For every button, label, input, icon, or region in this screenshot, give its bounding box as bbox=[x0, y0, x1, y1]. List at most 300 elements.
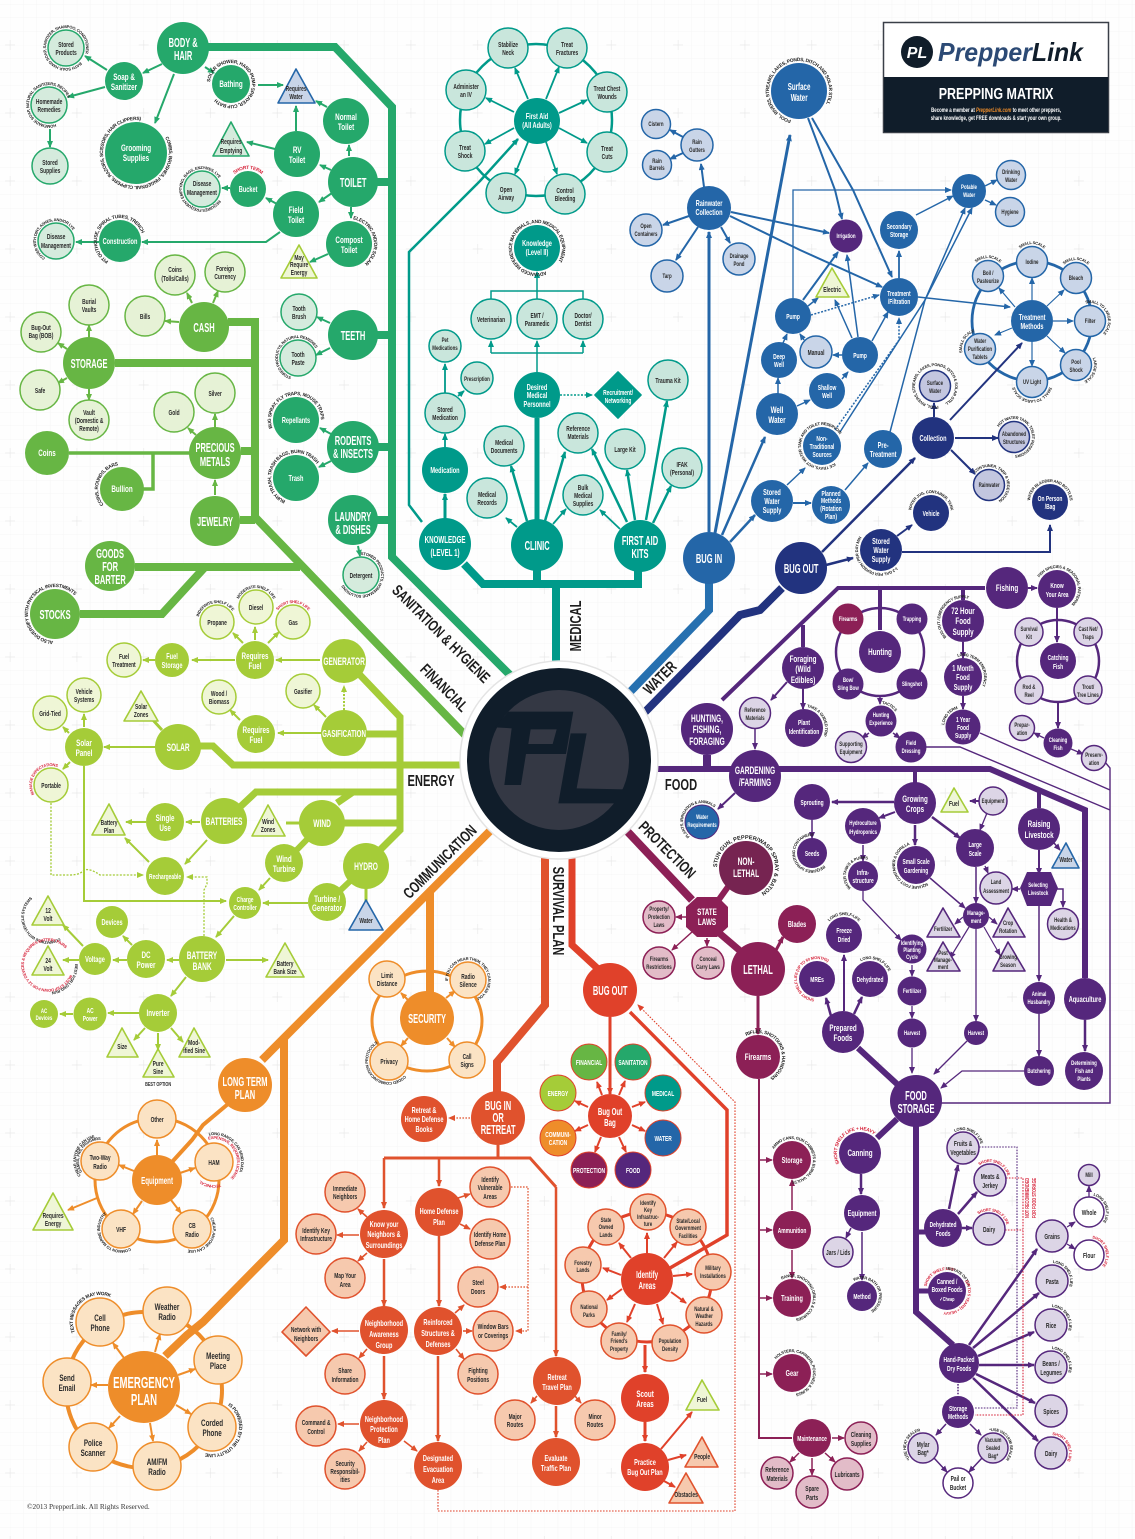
Catching Fish: Catching bbox=[1048, 655, 1069, 662]
Aquaculture bbox=[1064, 978, 1106, 1020]
Repellants: Repellants bbox=[282, 417, 310, 425]
Pet Medications: Pet bbox=[442, 337, 449, 344]
Reference Materials: Materials bbox=[568, 434, 589, 441]
Property / Protection Laws: Property/ bbox=[649, 906, 669, 913]
Hunting Experience: Hunting bbox=[873, 712, 889, 719]
State/Local Government Facilities: Facilities bbox=[679, 1233, 697, 1240]
Send Email: Send bbox=[59, 1373, 75, 1383]
triangle: Growing Season: Growing bbox=[999, 954, 1017, 961]
Gasifier: Gasifier bbox=[294, 689, 313, 696]
Pail or Bucket bbox=[943, 1468, 973, 1498]
Stored Medication: Medication bbox=[432, 415, 458, 422]
GARDENING / FARMING: GARDENING bbox=[735, 764, 775, 776]
Deep Well bbox=[761, 342, 797, 378]
triangle: Solar Zones bbox=[124, 691, 158, 721]
HUNTING, FISHING, FORAGING: FORAGING bbox=[689, 735, 725, 747]
Solar Panel bbox=[65, 728, 103, 766]
Inverter bbox=[139, 994, 177, 1032]
GARDENING / FARMING: /FARMING bbox=[739, 776, 771, 788]
Cleaning Supplies: Cleaning bbox=[851, 1432, 872, 1439]
Catching Fish bbox=[1040, 643, 1076, 679]
First Aid (All Adults): First Aid bbox=[526, 113, 548, 121]
ENERGY: ENERGY bbox=[548, 1091, 568, 1098]
Requires Fuel 2: Fuel bbox=[250, 735, 262, 745]
Treatment / Filtration: /Filtration bbox=[888, 299, 910, 306]
triangle: Battery Bank Size bbox=[266, 943, 304, 977]
Identify Vulnerable Areas bbox=[470, 1167, 510, 1207]
Reinforced Structures & Defenses: Defenses bbox=[426, 1341, 451, 1349]
Bow / Sling Bow: Sling Bow bbox=[838, 685, 859, 692]
Non-Traditional Sources: ICE TRAYS, HOT WATER TANK AND TOILET RESERVOIR bbox=[798, 422, 842, 470]
Reference Materials: Reference bbox=[566, 426, 590, 433]
Water Purification Tablets: Tablets bbox=[972, 354, 988, 361]
Dairy: SHORT SHELF LIFE bbox=[1050, 1426, 1079, 1464]
Share Information bbox=[325, 1354, 365, 1394]
Boil / Pasteurize: SMALL SCALE bbox=[973, 254, 1003, 264]
Firearms bbox=[832, 604, 864, 634]
Control Bleeding bbox=[545, 174, 585, 214]
arrows: bug out bbox=[575, 1017, 692, 1487]
MREs: SHORT SHELF LIFE (UP TO 60 MONTHS) bbox=[786, 948, 831, 1004]
Animal Husbandry bbox=[1023, 982, 1055, 1014]
Command & Control: Control bbox=[307, 1429, 325, 1436]
Privacy: CODED COMMUNICATION PROTOCOLS bbox=[365, 1041, 406, 1085]
Preservation: ation bbox=[1089, 760, 1099, 767]
Fertilizer: Fertilizer bbox=[903, 988, 922, 995]
IFAK (Personal): IFAK bbox=[677, 462, 688, 469]
panel: sanitation & hygiene: ELECTRIC AND/OR SOLAR bbox=[353, 216, 378, 266]
CLINIC: CLINIC bbox=[525, 540, 550, 554]
Shallow Well bbox=[809, 373, 845, 409]
Treatment Methods: Treatment bbox=[1019, 314, 1046, 322]
Storage Methods bbox=[942, 1396, 974, 1428]
Command & Control bbox=[296, 1406, 336, 1446]
Inverter: Inverter bbox=[146, 1008, 170, 1018]
Voltage: Voltage bbox=[85, 956, 105, 964]
Small Scale Gardening: Gardening bbox=[904, 868, 929, 875]
BATTERY BANK: BATTERY bbox=[187, 949, 217, 961]
Steel Doors: Steel bbox=[472, 1280, 484, 1287]
rings: communication bbox=[66, 971, 482, 1468]
Compost Toilet: Compost bbox=[335, 235, 363, 245]
Stored Water Supply (bug out): Supply bbox=[872, 556, 890, 564]
Prepared Foods: Foods bbox=[834, 1033, 852, 1043]
FOOD STORAGE: STORAGE bbox=[898, 1103, 935, 1117]
Cleaning Fish: Cleaning bbox=[1049, 737, 1067, 744]
WIND: WIND bbox=[313, 817, 331, 829]
PROTECTION: PROTECTION bbox=[573, 1168, 605, 1175]
Firearms: Firearms bbox=[745, 1052, 771, 1062]
BODY & HAIR bbox=[157, 22, 209, 74]
Medication: Medication bbox=[430, 467, 460, 475]
SANITATION bbox=[615, 1044, 651, 1080]
Practice Bug Out Plan bbox=[621, 1443, 669, 1491]
Freeze Dried: Freeze bbox=[836, 928, 852, 935]
Pre-Treatment: Treatment bbox=[870, 451, 897, 459]
Land Assessment: Land bbox=[991, 879, 1001, 886]
Treat Cuts: Treat bbox=[601, 146, 613, 153]
Flour bbox=[1074, 1231, 1115, 1270]
trunk lines: medical bbox=[460, 44, 638, 662]
CB Radio: Radio bbox=[185, 1232, 199, 1239]
Cleaning Fish: Fish bbox=[1053, 745, 1063, 752]
Reference Materials bbox=[558, 413, 598, 453]
Animal Husbandry: Animal bbox=[1032, 991, 1047, 998]
Military Installations bbox=[695, 1254, 731, 1290]
Medication bbox=[422, 447, 468, 493]
Radio Silence: Silence bbox=[460, 982, 477, 989]
triangle: Fuel bbox=[941, 788, 968, 812]
On Person / Bag bbox=[1026, 478, 1074, 520]
Repellants: BUG SPRAY, FLY TRAPS, MOUSE TRAPS bbox=[268, 392, 324, 429]
Storage: Storage bbox=[782, 1157, 803, 1165]
Field Dressing: Dressing bbox=[902, 748, 920, 755]
Pasta: Pasta bbox=[1046, 1279, 1059, 1286]
Solar Panel: Panel bbox=[76, 748, 92, 758]
Prescription: Prescription bbox=[464, 376, 490, 383]
Rainwater Collection: Collection bbox=[695, 209, 723, 217]
Mill bbox=[1078, 1164, 1100, 1186]
arrows: communication bbox=[68, 991, 455, 1441]
Know Your Area bbox=[1036, 554, 1092, 608]
Shallow Well: Well bbox=[822, 393, 832, 400]
FIRST AID KITS bbox=[614, 520, 666, 572]
Corded Phone: Corded bbox=[201, 1418, 223, 1428]
HAM: LONG RANGE, CAN SEND DATA bbox=[208, 1132, 244, 1172]
Plant Identification: TAKE A GUIDED TRIP bbox=[805, 699, 836, 739]
Preparation: Prepar- bbox=[1014, 722, 1030, 729]
Filter: Filter bbox=[1085, 318, 1096, 325]
COMMUNICATION bbox=[540, 1120, 576, 1156]
Pre-Treatment bbox=[864, 430, 902, 468]
Police Scanner: Police bbox=[84, 1438, 103, 1448]
Rice: Rice bbox=[1046, 1323, 1057, 1330]
Fruits & Vegetables: Vegetables bbox=[950, 1150, 976, 1157]
Treat Fractures: Fractures bbox=[556, 50, 579, 57]
Forestry Lands bbox=[565, 1247, 601, 1283]
Disease Management: Management bbox=[187, 190, 217, 197]
Cistern bbox=[642, 110, 670, 138]
Drinking Water bbox=[996, 160, 1026, 190]
Evaluate Traffic Plan bbox=[532, 1438, 580, 1486]
panel: communication bbox=[32, 828, 492, 1491]
AM/FM Radio: AM/FM bbox=[147, 1457, 167, 1467]
Drainage Pond: Pond bbox=[734, 261, 744, 268]
HUNTING, FISHING, FORAGING: HUNTING, bbox=[691, 712, 723, 724]
CASH bbox=[179, 302, 229, 352]
Single Use bbox=[146, 803, 184, 841]
Medical Documents: Documents bbox=[491, 448, 518, 455]
EMT / Paramedic bbox=[517, 299, 557, 339]
1 Year Food Supply bbox=[937, 702, 980, 744]
Preservation bbox=[1082, 746, 1106, 770]
Grid-Tied: Grid-Tied bbox=[39, 711, 61, 718]
Surface Water (bug out): Water bbox=[929, 388, 942, 395]
Pool Shock: LARGE SCALE bbox=[1084, 358, 1097, 384]
Stored Water Supply: Water bbox=[764, 498, 780, 506]
Homemade Remedies: Homemade bbox=[36, 99, 63, 106]
label: Protection: PROTECTION bbox=[635, 818, 699, 882]
LAUNDRY & DISHES: LAUNDRY bbox=[335, 511, 371, 525]
Limit Distance: Limit bbox=[381, 973, 393, 980]
72 Hour Food Supply: BUG OUT / EMERGENCY SUPPLY bbox=[927, 585, 971, 641]
label: Communication: COMMUNICATION bbox=[400, 822, 480, 902]
Stored Supplies: Stored bbox=[42, 160, 58, 167]
Major Routes bbox=[495, 1400, 535, 1440]
Identifying Planting Cycle: Cycle bbox=[906, 954, 918, 961]
trunk lines: energy bbox=[200, 675, 462, 903]
section labels bbox=[389, 581, 699, 955]
Neighborhood Protection Plan: Neighborhood bbox=[365, 1416, 403, 1424]
Infrastructure: Infra- bbox=[857, 870, 869, 877]
Pool Shock: Shock bbox=[1070, 367, 1084, 374]
Equipment (canning) bbox=[844, 1195, 880, 1231]
Pasta bbox=[1036, 1254, 1080, 1297]
panel: protection bbox=[626, 823, 877, 1508]
Management bbox=[963, 903, 989, 929]
Construction: Construction bbox=[103, 238, 137, 246]
Surface Water (bug out): POOL, RIVERS, STREAMS, LAKES, PONDS, DITCH & SOLAR STILL bbox=[904, 355, 966, 417]
Land Assessment: Assessment bbox=[983, 888, 1009, 895]
Health & Medications bbox=[1048, 908, 1078, 940]
Lubricants bbox=[831, 1458, 863, 1490]
Canning bbox=[822, 1115, 881, 1174]
Trout / Tree Lines: Trout/ bbox=[1082, 684, 1095, 691]
Abandoned Structures: Structures bbox=[1003, 439, 1025, 446]
Veterinarian: Veterinarian bbox=[477, 317, 505, 324]
LETHAL bbox=[731, 942, 785, 996]
Turbine / Generator: Generator bbox=[312, 903, 342, 913]
Land Assessment bbox=[980, 872, 1012, 904]
triangle: 12 Volt: 12 bbox=[45, 908, 51, 915]
FOOD STORAGE: FOOD bbox=[905, 1090, 927, 1104]
Bleach: SMALL SCALE bbox=[1062, 257, 1090, 265]
Burial Vaults bbox=[69, 285, 109, 325]
tagline bbox=[931, 107, 1062, 122]
Fruits & Vegetables: Fruits & bbox=[954, 1141, 973, 1148]
Dehydrated: LONG SHELF-LIFE bbox=[858, 950, 895, 973]
Identify Home Defense Plan: Identify Home bbox=[474, 1232, 507, 1239]
Retreat Travel Plan bbox=[533, 1357, 581, 1405]
Open Airway: Airway bbox=[498, 195, 515, 202]
triangle: Water: Water bbox=[359, 918, 373, 925]
arrows: bug in bbox=[332, 1158, 581, 1451]
NON-LETHAL bbox=[710, 823, 791, 898]
Harvest bbox=[898, 1018, 926, 1048]
Growing Crops: Growing bbox=[902, 794, 928, 804]
1 Month Food Supply: LONG TERM EMERGENCY bbox=[955, 644, 997, 689]
Military Installations: Military bbox=[705, 1265, 721, 1272]
triangle: Pest Management: Manage- bbox=[934, 957, 952, 964]
Stored Supplies bbox=[32, 148, 68, 184]
Stored Supplies: Supplies bbox=[40, 168, 61, 175]
Gas bbox=[275, 600, 311, 640]
triangle: Pest Management: ment bbox=[938, 964, 948, 971]
diamond: Network with Neighbors: Neighbors bbox=[294, 1336, 319, 1343]
Surface Water (bug out): Surface bbox=[927, 380, 943, 387]
Prescription bbox=[461, 362, 493, 394]
Planned Methods: Methods bbox=[821, 498, 842, 505]
Pail or Bucket: Bucket bbox=[950, 1485, 966, 1492]
Stored Medication: Stored bbox=[437, 407, 453, 414]
Pump 2 bbox=[842, 337, 878, 373]
Two-Way Radio bbox=[73, 1135, 120, 1181]
Sprouting bbox=[794, 784, 830, 820]
Gas: Gas bbox=[288, 620, 298, 627]
Gear: Gear bbox=[786, 1370, 799, 1378]
Natural & Weather Hazards: Weather bbox=[696, 1313, 714, 1320]
Propane: INDEFINITE SHELF LIFE bbox=[196, 600, 234, 616]
Lubricants: Lubricants bbox=[835, 1472, 860, 1479]
Manual bbox=[800, 336, 832, 368]
arrows: medical bbox=[409, 67, 671, 529]
Bug Out Bag: Bug Out bbox=[598, 1105, 622, 1117]
Prepared Foods bbox=[822, 1011, 864, 1053]
First Aid (All Adults): (All Adults) bbox=[522, 122, 552, 130]
Minor Routes bbox=[575, 1400, 615, 1440]
STORAGE: STORAGE bbox=[71, 358, 108, 372]
Iodine bbox=[1016, 241, 1048, 278]
GOODS FOR BARTER bbox=[85, 541, 135, 591]
Rain Gutters: Gutters bbox=[689, 147, 705, 154]
Cell Phone bbox=[70, 1292, 125, 1347]
dotted arrow: recruitment bbox=[560, 394, 592, 396]
Cell Phone: Phone bbox=[91, 1323, 110, 1333]
Trauma Kit: Trauma Kit bbox=[655, 378, 681, 385]
FOOD: FOOD bbox=[626, 1168, 641, 1175]
Plant Identification bbox=[785, 699, 836, 747]
GASIFICATION bbox=[321, 710, 367, 756]
SOLAR bbox=[155, 724, 201, 770]
Propane bbox=[196, 600, 235, 640]
Normal Toilet bbox=[323, 98, 369, 144]
Field Toilet: Field bbox=[289, 205, 304, 215]
DC Power bbox=[127, 940, 165, 978]
Stabilize Neck bbox=[488, 28, 528, 68]
triangle: Wind Zones: Zones bbox=[261, 827, 276, 834]
72 Hour Food Supply bbox=[927, 585, 984, 642]
Stabilize Neck: Stabilize bbox=[498, 42, 519, 49]
Storage bbox=[769, 1126, 826, 1188]
Normal Toilet: Toilet bbox=[338, 122, 355, 132]
triangle: Crop Rotation bbox=[993, 908, 1025, 937]
triangle: Water: Water bbox=[1059, 857, 1073, 864]
Beans / Legumes: LONG SHELF LIFE bbox=[1049, 1340, 1079, 1376]
TEETH: TEETH bbox=[341, 330, 365, 344]
Grains: Grains bbox=[1044, 1234, 1060, 1241]
Identify Areas bbox=[621, 1253, 673, 1305]
Preparation: ation bbox=[1017, 730, 1027, 737]
Bills bbox=[125, 296, 165, 336]
Fuel Storage: Storage bbox=[162, 662, 183, 670]
Pasta: LONG SHELF LIFE bbox=[1050, 1254, 1080, 1290]
Maintenance: Maintenance bbox=[797, 1436, 827, 1443]
NON-LETHAL: STUN GUN, PEPPER/WASP SPRAY & BATON bbox=[710, 823, 791, 898]
Gear: HOLSTERS, CARRIERS, POUCHES & SLINGS bbox=[772, 1339, 826, 1399]
Requires Fuel 2 bbox=[237, 715, 275, 753]
Fishing: Fishing bbox=[996, 583, 1018, 593]
Freeze Dried: LONG SHELF-LIFE bbox=[826, 911, 862, 923]
Beans / Legumes: Legumes bbox=[1040, 1370, 1062, 1377]
triangle: Requires Emptying: Emptying bbox=[220, 148, 242, 155]
arrows: protection bbox=[672, 917, 844, 1475]
Dehydrated Foods: Foods bbox=[936, 1231, 951, 1238]
FIRST AID KITS: KITS bbox=[631, 548, 649, 562]
Storage Methods: Methods bbox=[948, 1414, 969, 1421]
STOCKS: STOCKS bbox=[39, 609, 71, 623]
EMERGENCY PLAN: PLAN bbox=[131, 1390, 157, 1409]
Water Requirements: Requirements bbox=[687, 822, 717, 829]
triangle: Requires Emptying: Requires bbox=[221, 139, 242, 146]
BATTERIES bbox=[201, 798, 247, 844]
Canned / Boxed Foods bbox=[919, 1260, 980, 1324]
Hunting bbox=[859, 631, 901, 673]
Administer an IV: Administer bbox=[453, 84, 479, 91]
triangle: Battery Bank Size: Battery bbox=[277, 961, 294, 968]
trunk lines: protection bbox=[626, 830, 792, 1438]
triangle: Electric: Electric bbox=[823, 287, 841, 294]
arrows: water bug out bbox=[822, 343, 1050, 565]
triangle: Water bbox=[349, 900, 383, 930]
Treat Cuts bbox=[587, 132, 627, 172]
Butchering: Butchering bbox=[1027, 1068, 1051, 1075]
Canning: SHORT SHELF LIFE + HEAVY bbox=[822, 1115, 878, 1167]
Security Responsibilities bbox=[325, 1449, 365, 1489]
Other bbox=[138, 1100, 176, 1138]
Medical Records bbox=[467, 478, 507, 518]
triangle: Solar Zones: Solar bbox=[135, 704, 148, 711]
Canned / Boxed Foods: Boxed Foods bbox=[932, 1287, 963, 1294]
Coins bbox=[25, 431, 69, 475]
Conceal Carry Laws bbox=[692, 947, 724, 979]
triangle: May Require Energy: Energy bbox=[291, 270, 308, 277]
Home Defense Plan: Home Defense bbox=[420, 1208, 459, 1216]
Detergent: STORED PRODUCTS, HOMEMADE SOLUTIONS bbox=[342, 552, 384, 598]
LONG TERM PLAN: LONG TERM bbox=[223, 1076, 267, 1090]
LONG TERM PLAN bbox=[218, 1058, 272, 1112]
Equipment bbox=[979, 787, 1007, 815]
HAM bbox=[194, 1132, 244, 1188]
Collection bbox=[912, 417, 954, 459]
MEDICAL: MEDICAL bbox=[652, 1091, 674, 1098]
Call Signs bbox=[449, 1042, 485, 1078]
Rainwater Collection bbox=[687, 186, 731, 230]
Dairy (dehydrated): Dairy bbox=[983, 1227, 996, 1234]
Small Scale Gardening bbox=[883, 841, 935, 898]
Fighting Positions: Fighting bbox=[468, 1368, 488, 1375]
Desired Medical Personnel bbox=[514, 372, 560, 418]
Other: Other bbox=[151, 1117, 164, 1124]
dotted arrows: bug in bbox=[449, 1118, 528, 1331]
COMMUNICATION: CATION bbox=[549, 1140, 567, 1147]
BODY & HAIR: HAIR bbox=[174, 50, 193, 64]
triangle: May Require Energy: Require bbox=[290, 262, 309, 269]
GOODS FOR BARTER: BARTER bbox=[95, 574, 126, 588]
Know Your Area: Your Area bbox=[1046, 592, 1069, 599]
Beans / Legumes: Beans / bbox=[1042, 1361, 1060, 1368]
Propane: Propane bbox=[207, 620, 227, 627]
NON-LETHAL: NON- bbox=[738, 855, 754, 867]
triangle: Requires Energy bbox=[33, 1193, 73, 1230]
Firearms Restrictions bbox=[643, 947, 675, 979]
AM/FM Radio bbox=[133, 1442, 181, 1490]
Raising Livestock: Livestock bbox=[1025, 830, 1054, 840]
arrows: sanitation bbox=[50, 56, 360, 556]
Grains bbox=[1036, 1220, 1068, 1252]
TOILET bbox=[328, 157, 378, 207]
triangle: Obstacles: Obstacles bbox=[674, 1492, 698, 1499]
Property / Protection Laws: Protection bbox=[648, 914, 670, 921]
